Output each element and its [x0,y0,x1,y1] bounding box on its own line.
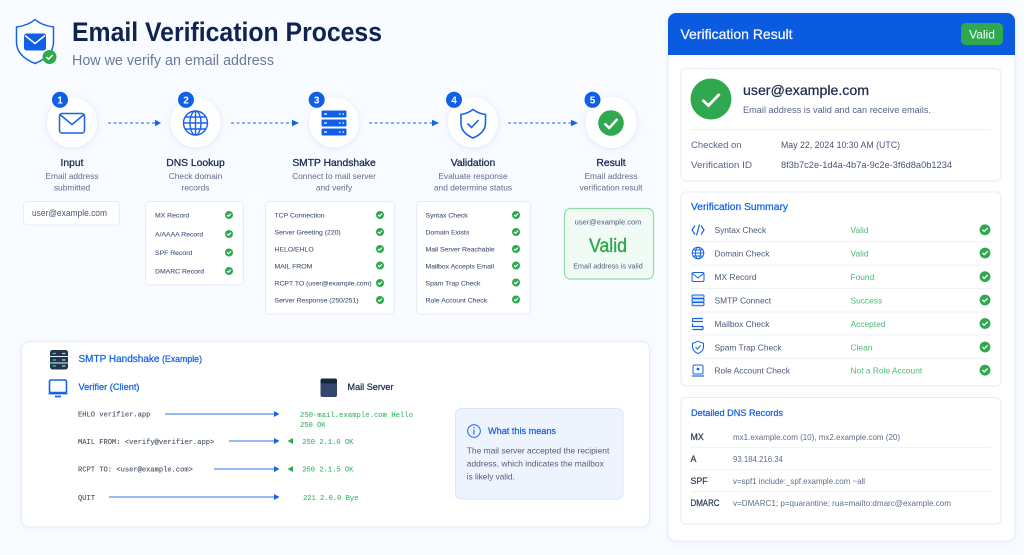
exchange: EHLO: 250-mail.example.com Hello [300,412,413,420]
step 2: DNS lookup [166,92,225,192]
icon: server stack [50,350,68,370]
exchange: EHLO: 250 OK [300,422,326,430]
step 3: SMTP handshake: and verify [316,182,353,192]
record: A [690,454,783,464]
DNS checks card: A/AAAA Record [155,232,204,238]
validation checks card: Spam Trap Check [426,280,481,288]
panel: SMTP handshake example [22,342,650,527]
row: mailbox check: Mailbox Check [714,319,770,329]
arrow 4 to 5 [508,120,578,126]
header bar [668,13,1015,55]
validation checks card: Domain Exists [426,230,470,236]
step 3: SMTP handshake: Connect to mail server [292,171,376,181]
record: SPF: v=spf1 include:_spf.example.com ~all [733,476,865,486]
row: spam trap check [692,341,990,354]
exchange: EHLO [78,411,413,430]
row: MX record [692,271,990,282]
exchange: RCPT TO: RCPT TO: <user@example.com> [78,466,193,474]
email address: user@example.com [743,82,869,98]
exchange: QUIT: 221 2.0.0 Bye [303,495,358,503]
exchange: RCPT TO: 250 2.1.5 OK [302,466,354,474]
title: Email Verification Process [72,17,382,47]
row: MX record: MX Record [714,272,757,282]
SMTP checks card: HELO/EHLO [274,246,314,254]
row: domain check [692,247,990,259]
result card [564,208,654,279]
validation checks card: Mailbox Accepts Email [426,264,494,270]
icon: large check [690,78,732,120]
result card: Valid [589,236,627,257]
step 2: DNS lookup: 2 [183,95,189,106]
row: mailbox check [692,318,990,330]
step 3: SMTP handshake [292,92,376,192]
step 5: result: Email address [584,171,638,181]
verification id: 8f3b7c2e-1d4a-4b7a-9c2e-3f6d8a0b1234 [781,160,952,170]
step 2: DNS lookup: records [182,182,209,192]
status text: Email address is valid and can receive emails. [743,105,931,115]
SMTP checks card: TCP Connection [274,212,325,220]
step 1: input: Input [61,158,84,169]
server label: Mail Server [348,382,394,392]
exchange: MAIL FROM: 250 2.1.0 OK [302,439,354,447]
step 1: input: Email address [45,171,99,181]
step 3: SMTP handshake: SMTP Handshake [292,158,376,169]
step 2: DNS lookup: DNS Lookup [166,158,225,169]
row: role account check: Not a Role Account [850,366,923,376]
callout heading: What this means [488,426,557,436]
client label: Verifier (Client) [78,382,140,392]
checked on: Checked on [691,140,742,150]
callout body [467,446,610,482]
step 1: input: submitted [54,182,90,192]
step 5: result [580,92,643,192]
row: domain check: Domain Check [714,248,770,258]
callout body: The mail server accepted the recipient [467,446,610,456]
step 1: input [45,92,99,192]
arrow 1 to 2 [108,120,161,126]
step 3: SMTP handshake: 3 [314,95,320,106]
row: syntax check [692,224,990,236]
header bar: Valid [969,28,995,42]
step 4: validation: 4 [451,95,457,106]
step 5: result: Result [596,158,626,169]
DNS checks card [146,202,244,285]
input email box [24,202,120,225]
icon: mail server [320,378,337,397]
callout body: address, which indicates the mailbox [467,458,604,468]
exchange: EHLO: EHLO verifier.app [78,411,150,419]
validation checks card: Mail Server Reachable [426,246,495,254]
header bar: Verification Result [680,26,793,42]
step 4: validation: and determine status [434,182,512,192]
callout: what this means [456,408,623,499]
icon: monitor [48,380,68,396]
exchange: RCPT TO [78,466,354,474]
SMTP checks card: MAIL FROM [274,264,313,270]
row: syntax check: Syntax Check [714,225,767,235]
SMTP checks card: Server Greeting (220) [274,230,341,236]
result card: user@example.com [575,218,641,226]
row: role account check [692,365,990,376]
validation checks card [416,202,530,314]
DNS checks card: SPF Record [155,250,192,257]
exchange: MAIL FROM: MAIL FROM: <verify@verifier.app> [78,439,214,447]
DNS checks card: MX Record [155,212,189,220]
card: address status [681,68,1001,181]
step 5: result: verification result [580,182,643,192]
callout body: is likely valid. [467,472,515,482]
heading note: (Example) [162,354,202,364]
row: MX record: Found [850,272,875,282]
record: DMARC: v=DMARC1; p=quarantine; rua=mailto:dmarc@example.com [733,498,951,508]
row: SMTP connect [692,295,990,306]
row: syntax check: Valid [850,225,869,235]
step 4: validation: Validation [451,158,495,169]
row: spam trap check: Spam Trap Check [714,342,782,352]
step 5: result: 5 [590,95,596,106]
DNS heading: Detailed DNS Records [691,408,783,419]
input email box: user@example.com [32,208,107,218]
summary heading: Verification Summary [691,202,788,213]
checked on: May 22, 2024 10:30 AM (UTC) [781,140,900,150]
exchange: QUIT [78,494,358,503]
card: detailed DNS records [681,398,1001,524]
record: MX: MX [690,432,704,442]
subtitle: How we verify an email address [72,52,274,69]
row: spam trap check: Clean [850,342,873,352]
record: A: 93.184.216.34 [733,454,783,464]
row: mailbox check: Accepted [850,319,886,329]
step 4: validation: Evaluate response [438,171,508,181]
panel: verification result [668,13,1015,541]
checked on [691,140,900,150]
verification id [691,160,952,170]
row: SMTP connect: Success [850,296,882,306]
arrow 2 to 3 [231,120,299,126]
SMTP checks card [266,202,394,314]
icon: email shield [16,20,56,64]
record: MX: mx1.example.com (10), mx2.example.com (20) [733,432,900,442]
step 1: input: 1 [57,95,63,106]
step 4: validation [434,92,512,192]
record: A: A [690,454,696,464]
row: SMTP connect: SMTP Connect [714,296,772,306]
result card: Email address is valid [573,262,643,270]
row: role account check: Role Account Check [714,366,791,376]
exchange: MAIL FROM [78,438,354,447]
card: verification summary [681,192,1001,386]
SMTP checks card: Server Response (250/251) [274,298,359,304]
exchange: QUIT: QUIT [78,495,95,503]
DNS checks card: DMARC Record [155,268,204,276]
SMTP checks card: RCPT TO (user@example.com) [274,280,372,288]
row: domain check: Valid [850,248,869,258]
validation checks card: Syntax Check [426,212,468,220]
record: SPF: SPF [690,476,708,486]
arrow 3 to 4 [369,120,439,126]
verification id: Verification ID [691,160,752,170]
heading: SMTP Handshake [78,354,160,365]
step 2: DNS lookup: Check domain [169,171,223,181]
record: DMARC: DMARC [690,498,720,508]
validation checks card: Role Account Check [426,298,488,304]
icon: info [468,425,480,437]
